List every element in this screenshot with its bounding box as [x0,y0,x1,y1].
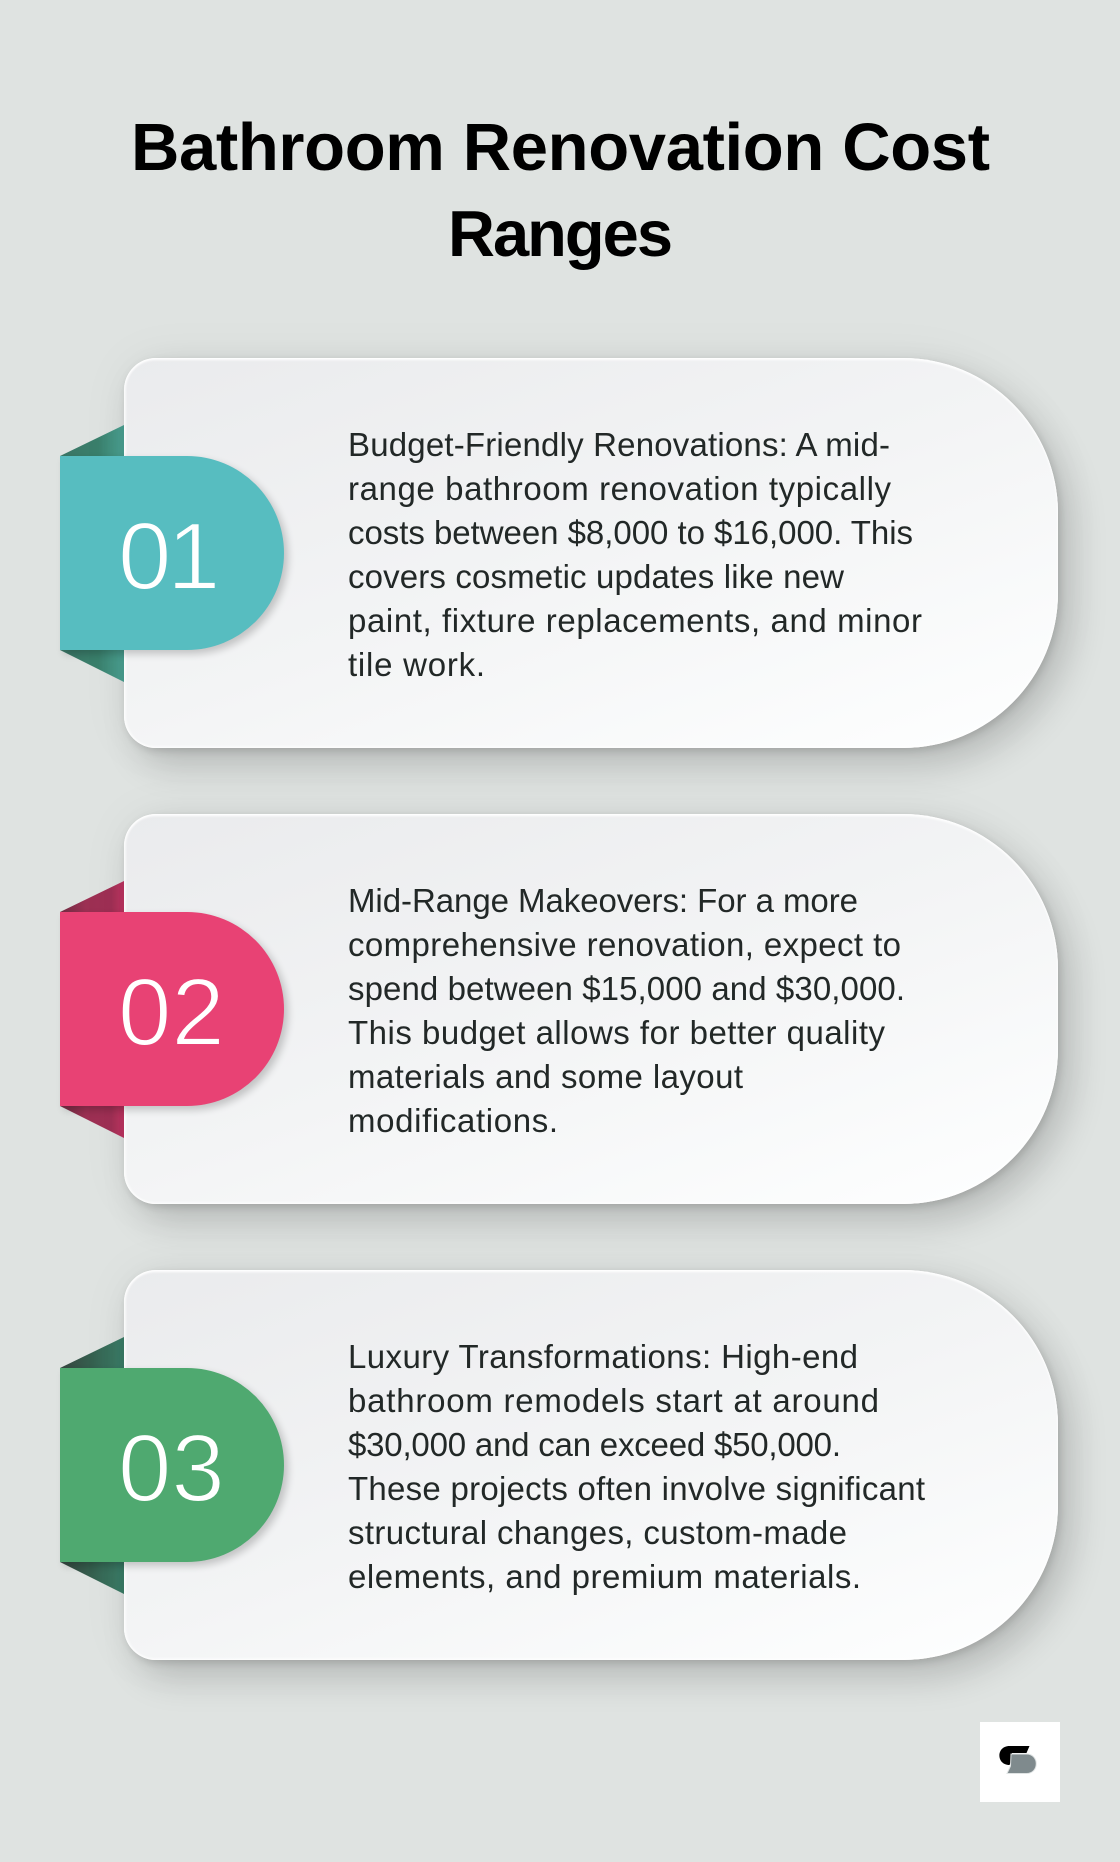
number 01: 1 [167,503,220,610]
description text: covers cosmetic updates like new [348,558,844,595]
title [131,110,990,270]
number 02: 02 [118,959,225,1066]
title: Ranges [448,197,673,270]
description text: tile work. [348,646,485,683]
panel: luxury transformations [60,1265,1088,1694]
description text: These projects often involve significant [348,1470,925,1507]
description text: structural changes, custom-made [348,1514,847,1551]
description text: Luxury Transformations: High-end [348,1338,858,1375]
panel: mid-range makeovers [60,809,1088,1238]
number badge 03 [60,1368,284,1562]
number badge 02 [60,912,284,1106]
description text: Mid-Range Makeovers: For a more [348,882,858,919]
description text: paint, fixture replacements, and minor [348,602,922,639]
logo [980,1722,1060,1802]
ribbon folds: crimson [60,881,124,1138]
number 01 [118,503,220,610]
description text: costs between $8,000 to $16,000. This [348,514,913,551]
description text [348,882,905,1139]
description text: range bathroom renovation typically [348,470,892,507]
title: Bathroom Renovation Cost [131,110,990,185]
description text: This budget allows for better quality [348,1014,886,1051]
card body [124,814,1058,1204]
number 03: 03 [118,1415,225,1522]
description text: modifications. [348,1102,558,1139]
description text: bathroom remodels start at around [348,1382,879,1419]
description text: elements, and premium materials. [348,1558,861,1595]
number badge 01 [60,456,284,650]
description text [348,1338,925,1595]
ribbon folds: teal [60,425,124,682]
description text: comprehensive renovation, expect to [348,926,901,963]
panel: budget-friendly renovations [60,353,1088,782]
ribbon folds: green [60,1337,124,1594]
description text [348,426,922,683]
number 01: 0 [118,503,171,610]
description text: materials and some layout [348,1058,743,1095]
description text: $30,000 and can exceed $50,000. [348,1426,841,1463]
card body [124,1270,1058,1660]
description text: spend between $15,000 and $30,000. [348,970,905,1007]
card body [124,358,1058,748]
description text: Budget-Friendly Renovations: A mid- [348,426,890,463]
